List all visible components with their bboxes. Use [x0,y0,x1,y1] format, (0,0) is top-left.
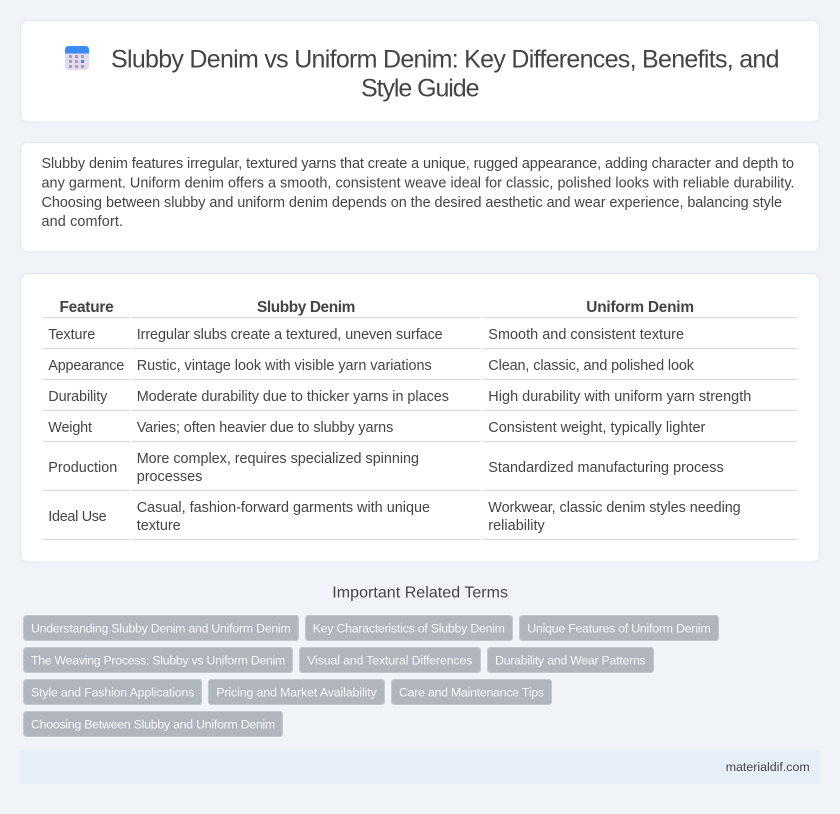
table row: ideal use: Workwear, classic denim styles needing [488,500,741,516]
intro text block: and comfort. [42,214,123,230]
heading: important related terms: Important Related Terms [332,584,508,602]
tag [300,648,480,672]
table row: durability: High durability with uniform yarn strength [488,389,751,405]
table row: ideal use: Ideal Use [48,509,107,525]
panel: title header [20,20,820,122]
table row: ideal use [43,500,797,539]
table row: appearance: Appearance [48,358,124,374]
tag [24,712,282,736]
table row: production [43,451,797,490]
table row: texture: Irregular slubs create a textured, uneven surface [137,327,443,343]
tag: Care and Maintenance Tips [399,685,544,699]
footer source text: materialdif.com [726,760,810,774]
tag: Understanding Slubby Denim and Uniform Denim [31,621,291,635]
table row: ideal use: reliability [488,518,545,534]
panel: comparison table [20,274,820,562]
intro text block: Slubby denim features irregular, textured yarns that create a unique, rugged appearance, adding character and depth to [42,156,794,172]
tag [24,616,298,640]
table row: weight: Consistent weight, typically lighter [488,420,706,436]
tag: Unique Features of Uniform Denim [527,621,711,635]
related terms tag list [24,616,718,736]
table row: weight [43,420,797,442]
tag: Durability and Wear Patterns [495,653,646,667]
panel: introduction [20,142,820,252]
table row: appearance: Rustic, vintage look with visible yarn variations [137,358,432,374]
tag [488,648,654,672]
table row: production: Production [48,460,117,476]
tag: Style and Fashion Applications [31,685,194,699]
table header row: Slubby Denim [257,299,355,316]
title: Slubby Denim vs Uniform Denim: Key Differences, Benefits, and [111,46,780,74]
tag [24,680,202,704]
table row: weight: Weight [48,420,92,436]
table row: texture: Smooth and consistent texture [488,327,684,343]
table row: durability: Moderate durability due to thicker yarns in places [137,389,449,405]
tag [208,680,384,704]
table row: durability: Durability [48,389,108,405]
table row: appearance: Clean, classic, and polished look [488,358,695,374]
table header row: Feature [60,299,114,316]
table row: texture [43,327,797,349]
tag: Choosing Between Slubby and Uniform Denim [31,717,275,731]
tag [306,616,512,640]
intro text block: any garment. Uniform denim offers a smooth, consistent weave ideal for classic, polished looks with reliable durability. [42,176,794,192]
tag [520,616,718,640]
title: Style Guide [361,74,480,102]
table row: weight: Varies; often heavier due to slubby yarns [137,420,393,436]
table row: ideal use: texture [137,518,181,534]
table header row: Uniform Denim [586,299,694,316]
icon: calendar [65,46,89,70]
table row: ideal use: Casual, fashion-forward garments with unique [137,500,430,516]
title [111,46,780,102]
table row: appearance [43,358,797,379]
intro text block: Choosing between slubby and uniform denim depends on the desired aesthetic and wear experience, balancing style [42,195,782,211]
table row: production: processes [137,469,202,485]
table header row [43,299,797,318]
tag: Key Characteristics of Slubby Denim [313,621,505,635]
intro text block [42,156,794,230]
table row: durability [43,389,797,410]
table row: production: Standardized manufacturing process [488,460,724,476]
tag [392,680,552,704]
tag: Pricing and Market Availability [216,685,378,699]
table row: production: More complex, requires specialized spinning [137,451,419,467]
tag: Visual and Textural Differences [307,653,472,667]
footer bar [20,750,820,784]
tag: The Weaving Process: Slubby vs Uniform Denim [31,653,285,667]
tag [24,648,292,672]
table row: texture: Texture [48,327,95,343]
